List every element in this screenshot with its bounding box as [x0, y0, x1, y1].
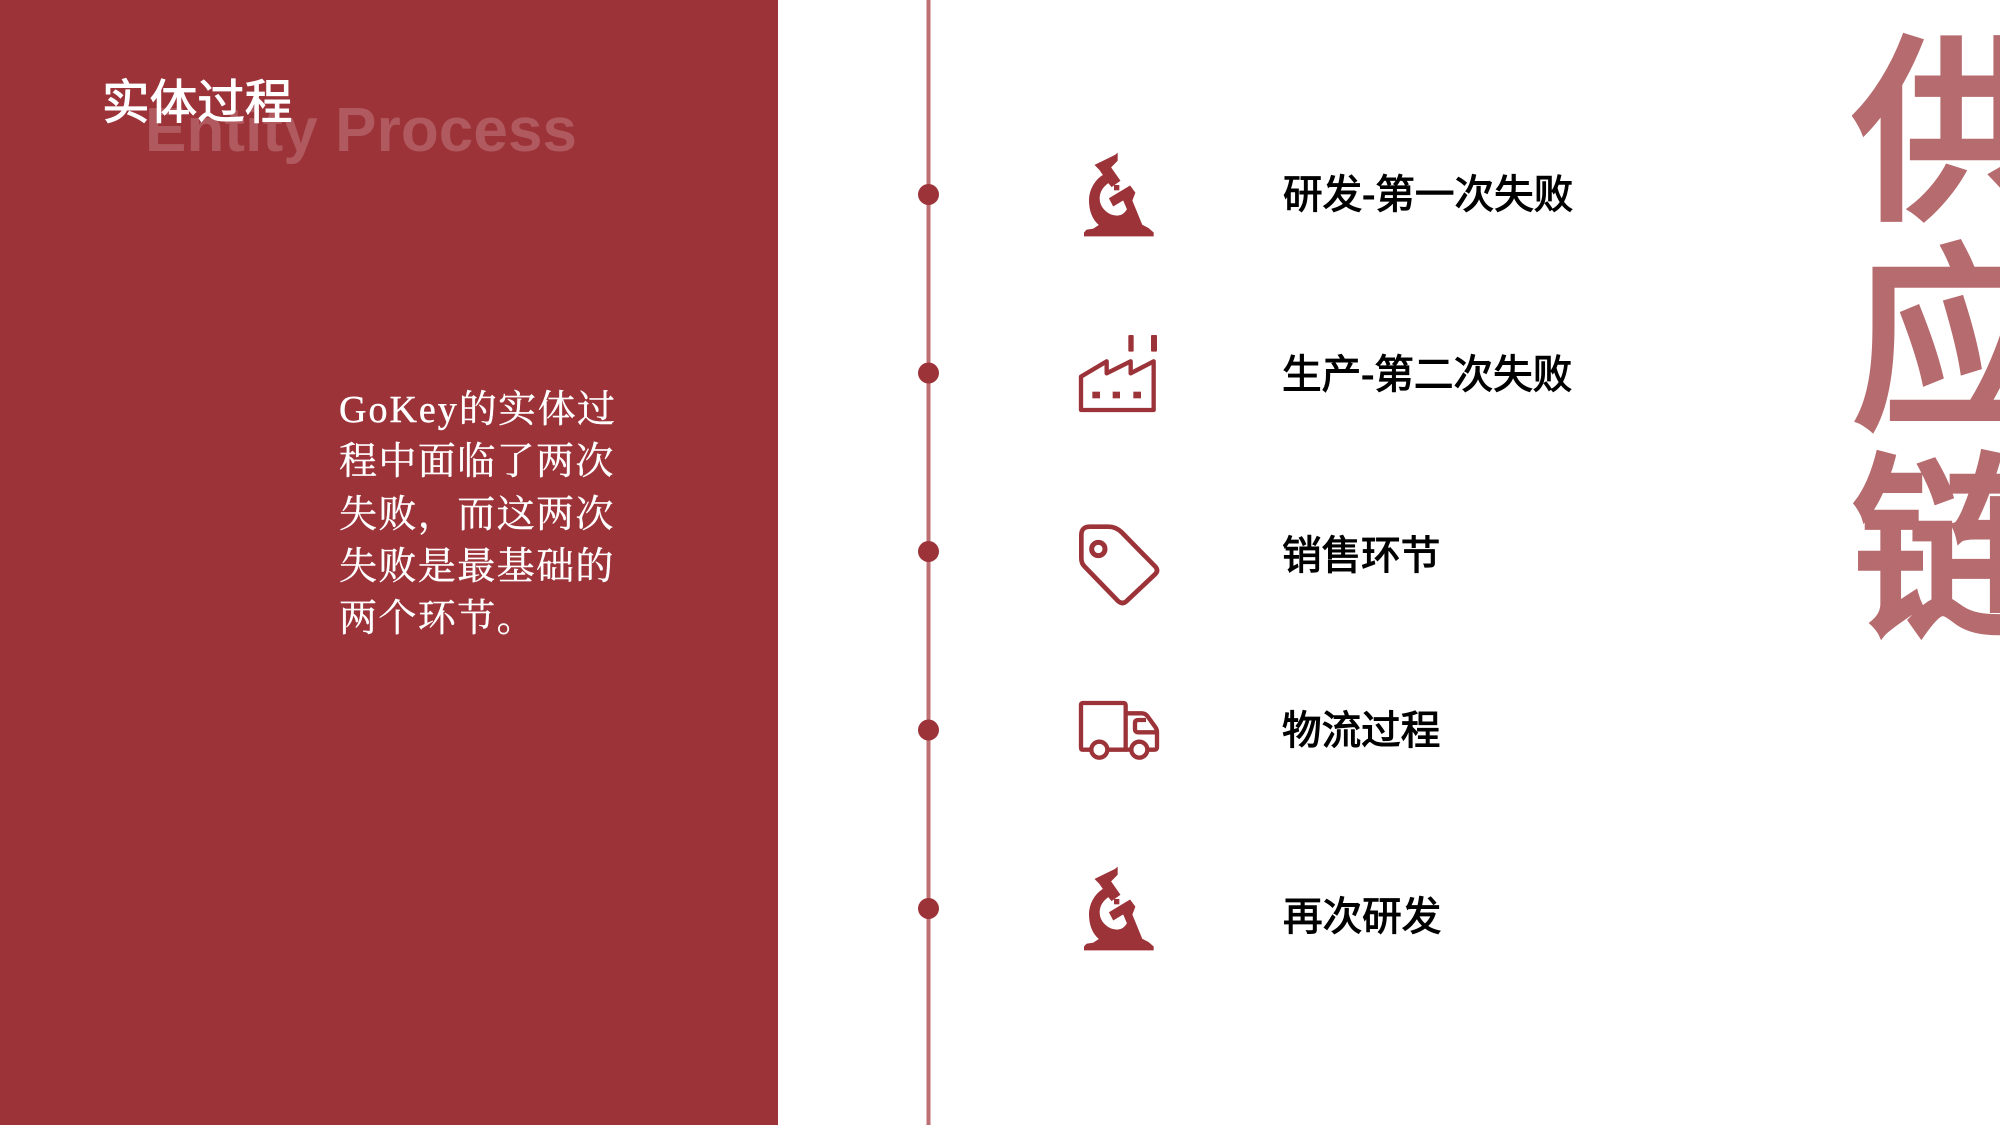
label: 生产-第二次失败: 生产-第二次失败 [1282, 353, 1572, 397]
label: 销售环节: 销售环节 [1282, 534, 1440, 578]
subtitle: Entity Process: Entity Process [145, 96, 577, 165]
icon: microscope again [1084, 866, 1154, 950]
label: 再次研发: 再次研发 [1283, 895, 1441, 939]
icon: delivery truck [1078, 700, 1160, 760]
text block: description [339, 389, 616, 640]
label: 物流过程: 物流过程 [1282, 709, 1440, 753]
timeline with dots [918, 0, 939, 1125]
text block: description: GoKey的实体过 [339, 389, 616, 431]
heading: 实体过程: 实体过程 [102, 64, 292, 133]
text block: description: 失败是最基础的 [339, 546, 615, 588]
text block: description: 两个环节。 [339, 598, 536, 640]
label: 研发-第一次失败: 研发-第一次失败 [1283, 173, 1573, 217]
icon: factory [1078, 335, 1157, 412]
text block: description: 失败，而这两次 [339, 494, 615, 536]
icon: microscope [1084, 152, 1154, 236]
vertical title: 供应链 [1852, 0, 2000, 660]
panel: left red background [0, 0, 778, 1125]
text block: description: 程中面临了两次 [339, 441, 615, 483]
icon: price tag [1079, 524, 1160, 606]
